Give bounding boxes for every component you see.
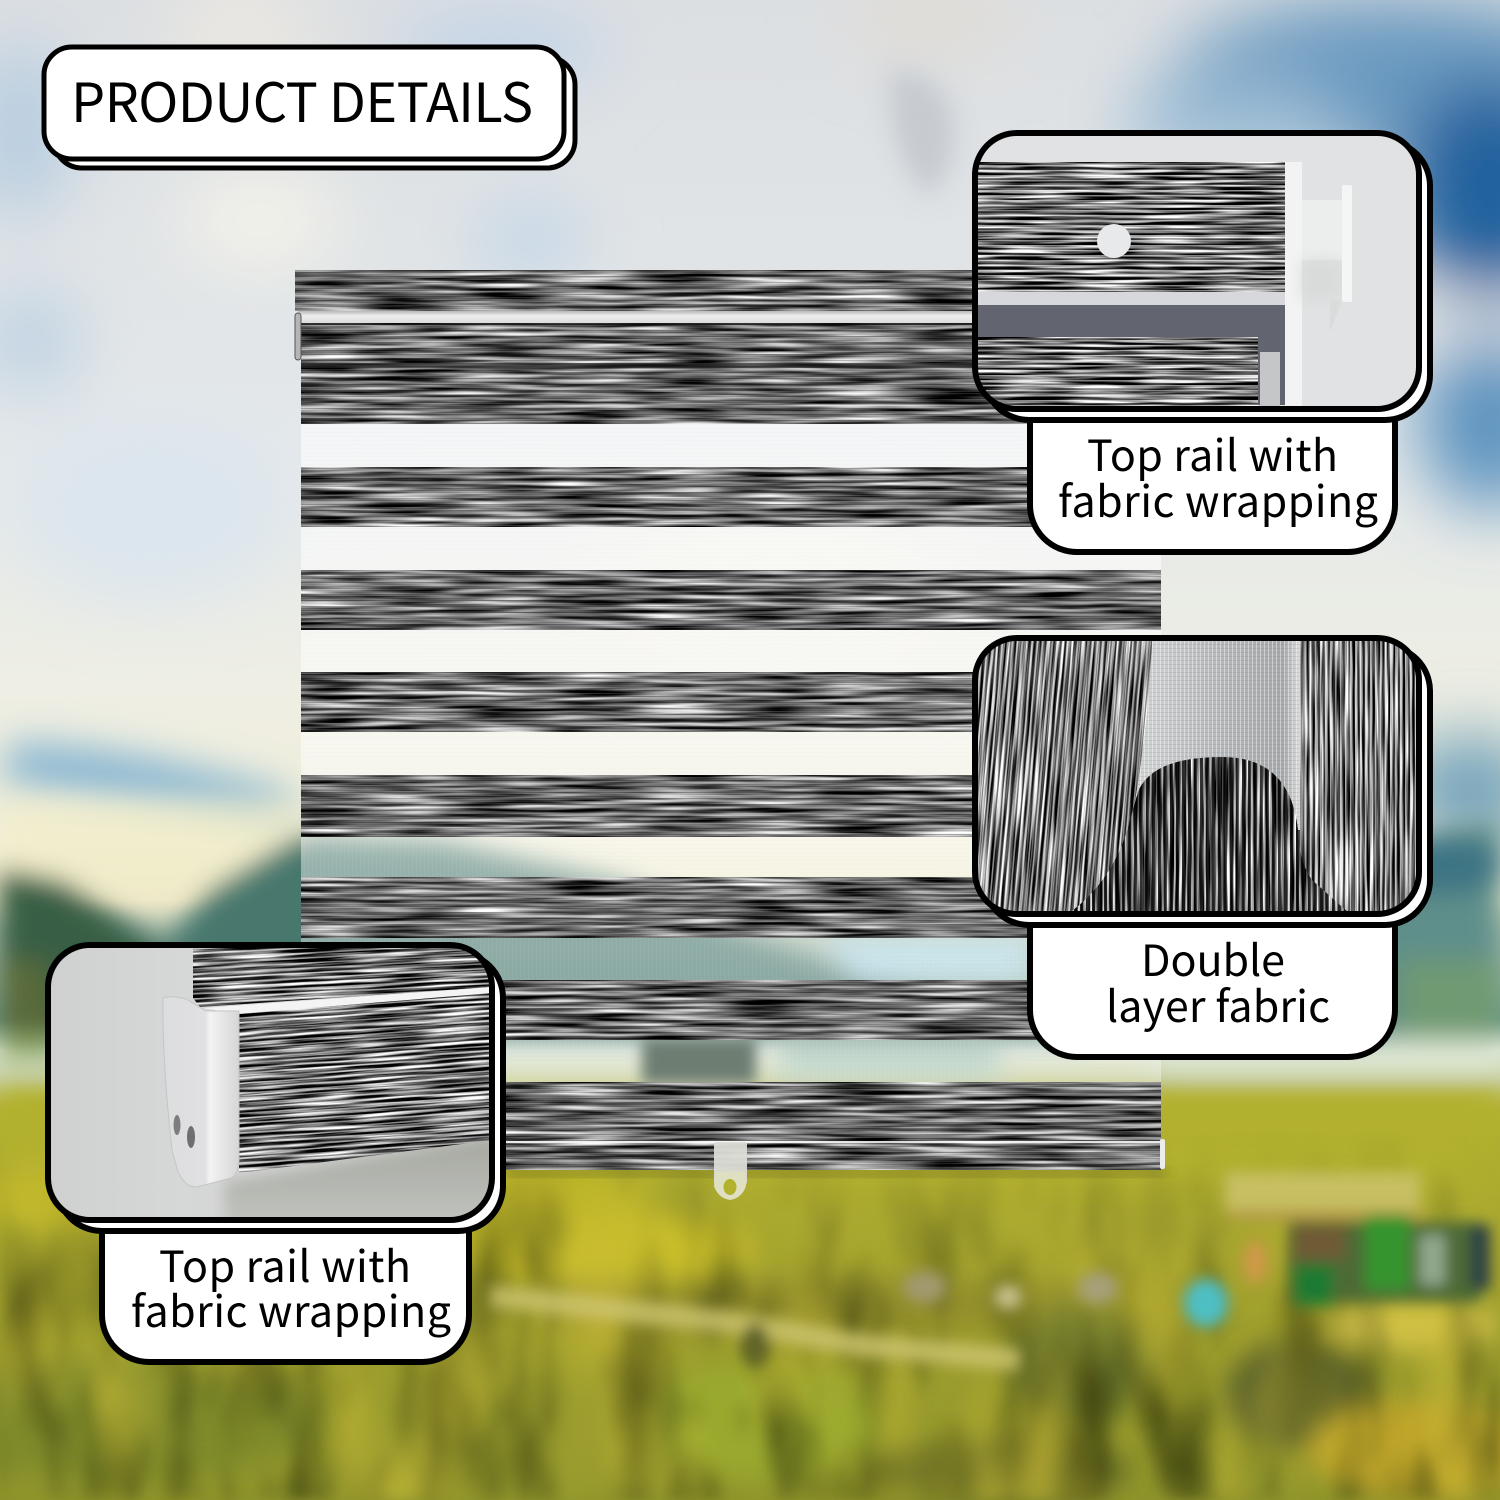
roller blind product — [295, 270, 1165, 1200]
photo frame border — [975, 133, 1419, 409]
caption box — [1030, 920, 1395, 1057]
caption box: Double — [1141, 927, 1285, 989]
blue haze streak — [0, 745, 290, 820]
pull cord tab — [714, 1142, 747, 1200]
photo frame shadow layer — [57, 953, 503, 1231]
title badge — [44, 47, 575, 168]
object seen through sheer stripe — [642, 1038, 756, 1084]
caption box: fabric wrapping — [131, 1278, 451, 1340]
callout: double layer fabric — [916, 589, 1430, 1057]
title text: PRODUCT DETAILS — [71, 59, 533, 138]
field highlights — [0, 1178, 1496, 1500]
caption box — [1030, 415, 1395, 552]
caption box — [102, 1225, 469, 1362]
field texture — [0, 1170, 1500, 1500]
callout: top rail left — [48, 912, 517, 1362]
bottom right end cap — [1160, 1139, 1165, 1169]
left end cap — [295, 313, 301, 360]
soft shadow under blind — [505, 1168, 1165, 1176]
photo frame border — [48, 945, 492, 1220]
photo frame shadow layer — [984, 141, 1430, 420]
caption box: Top rail with — [1087, 422, 1338, 484]
opaque fabric bands — [295, 270, 1165, 1170]
callout: top rail right — [975, 133, 1430, 552]
photo: fabric close-up — [978, 641, 1416, 911]
translucent sheer stripes — [301, 424, 1161, 1082]
caption box: fabric wrapping — [1058, 468, 1378, 530]
photo frame shadow layer — [984, 646, 1430, 925]
top rail white strip — [298, 311, 988, 323]
caption box: Top rail with — [159, 1233, 411, 1295]
field mottling — [0, 1170, 1500, 1500]
caption box: layer fabric — [1106, 973, 1330, 1035]
photo: rail close-up — [975, 133, 1419, 412]
photo frame border — [975, 638, 1419, 914]
photo: end cap close-up — [51, 948, 489, 1217]
